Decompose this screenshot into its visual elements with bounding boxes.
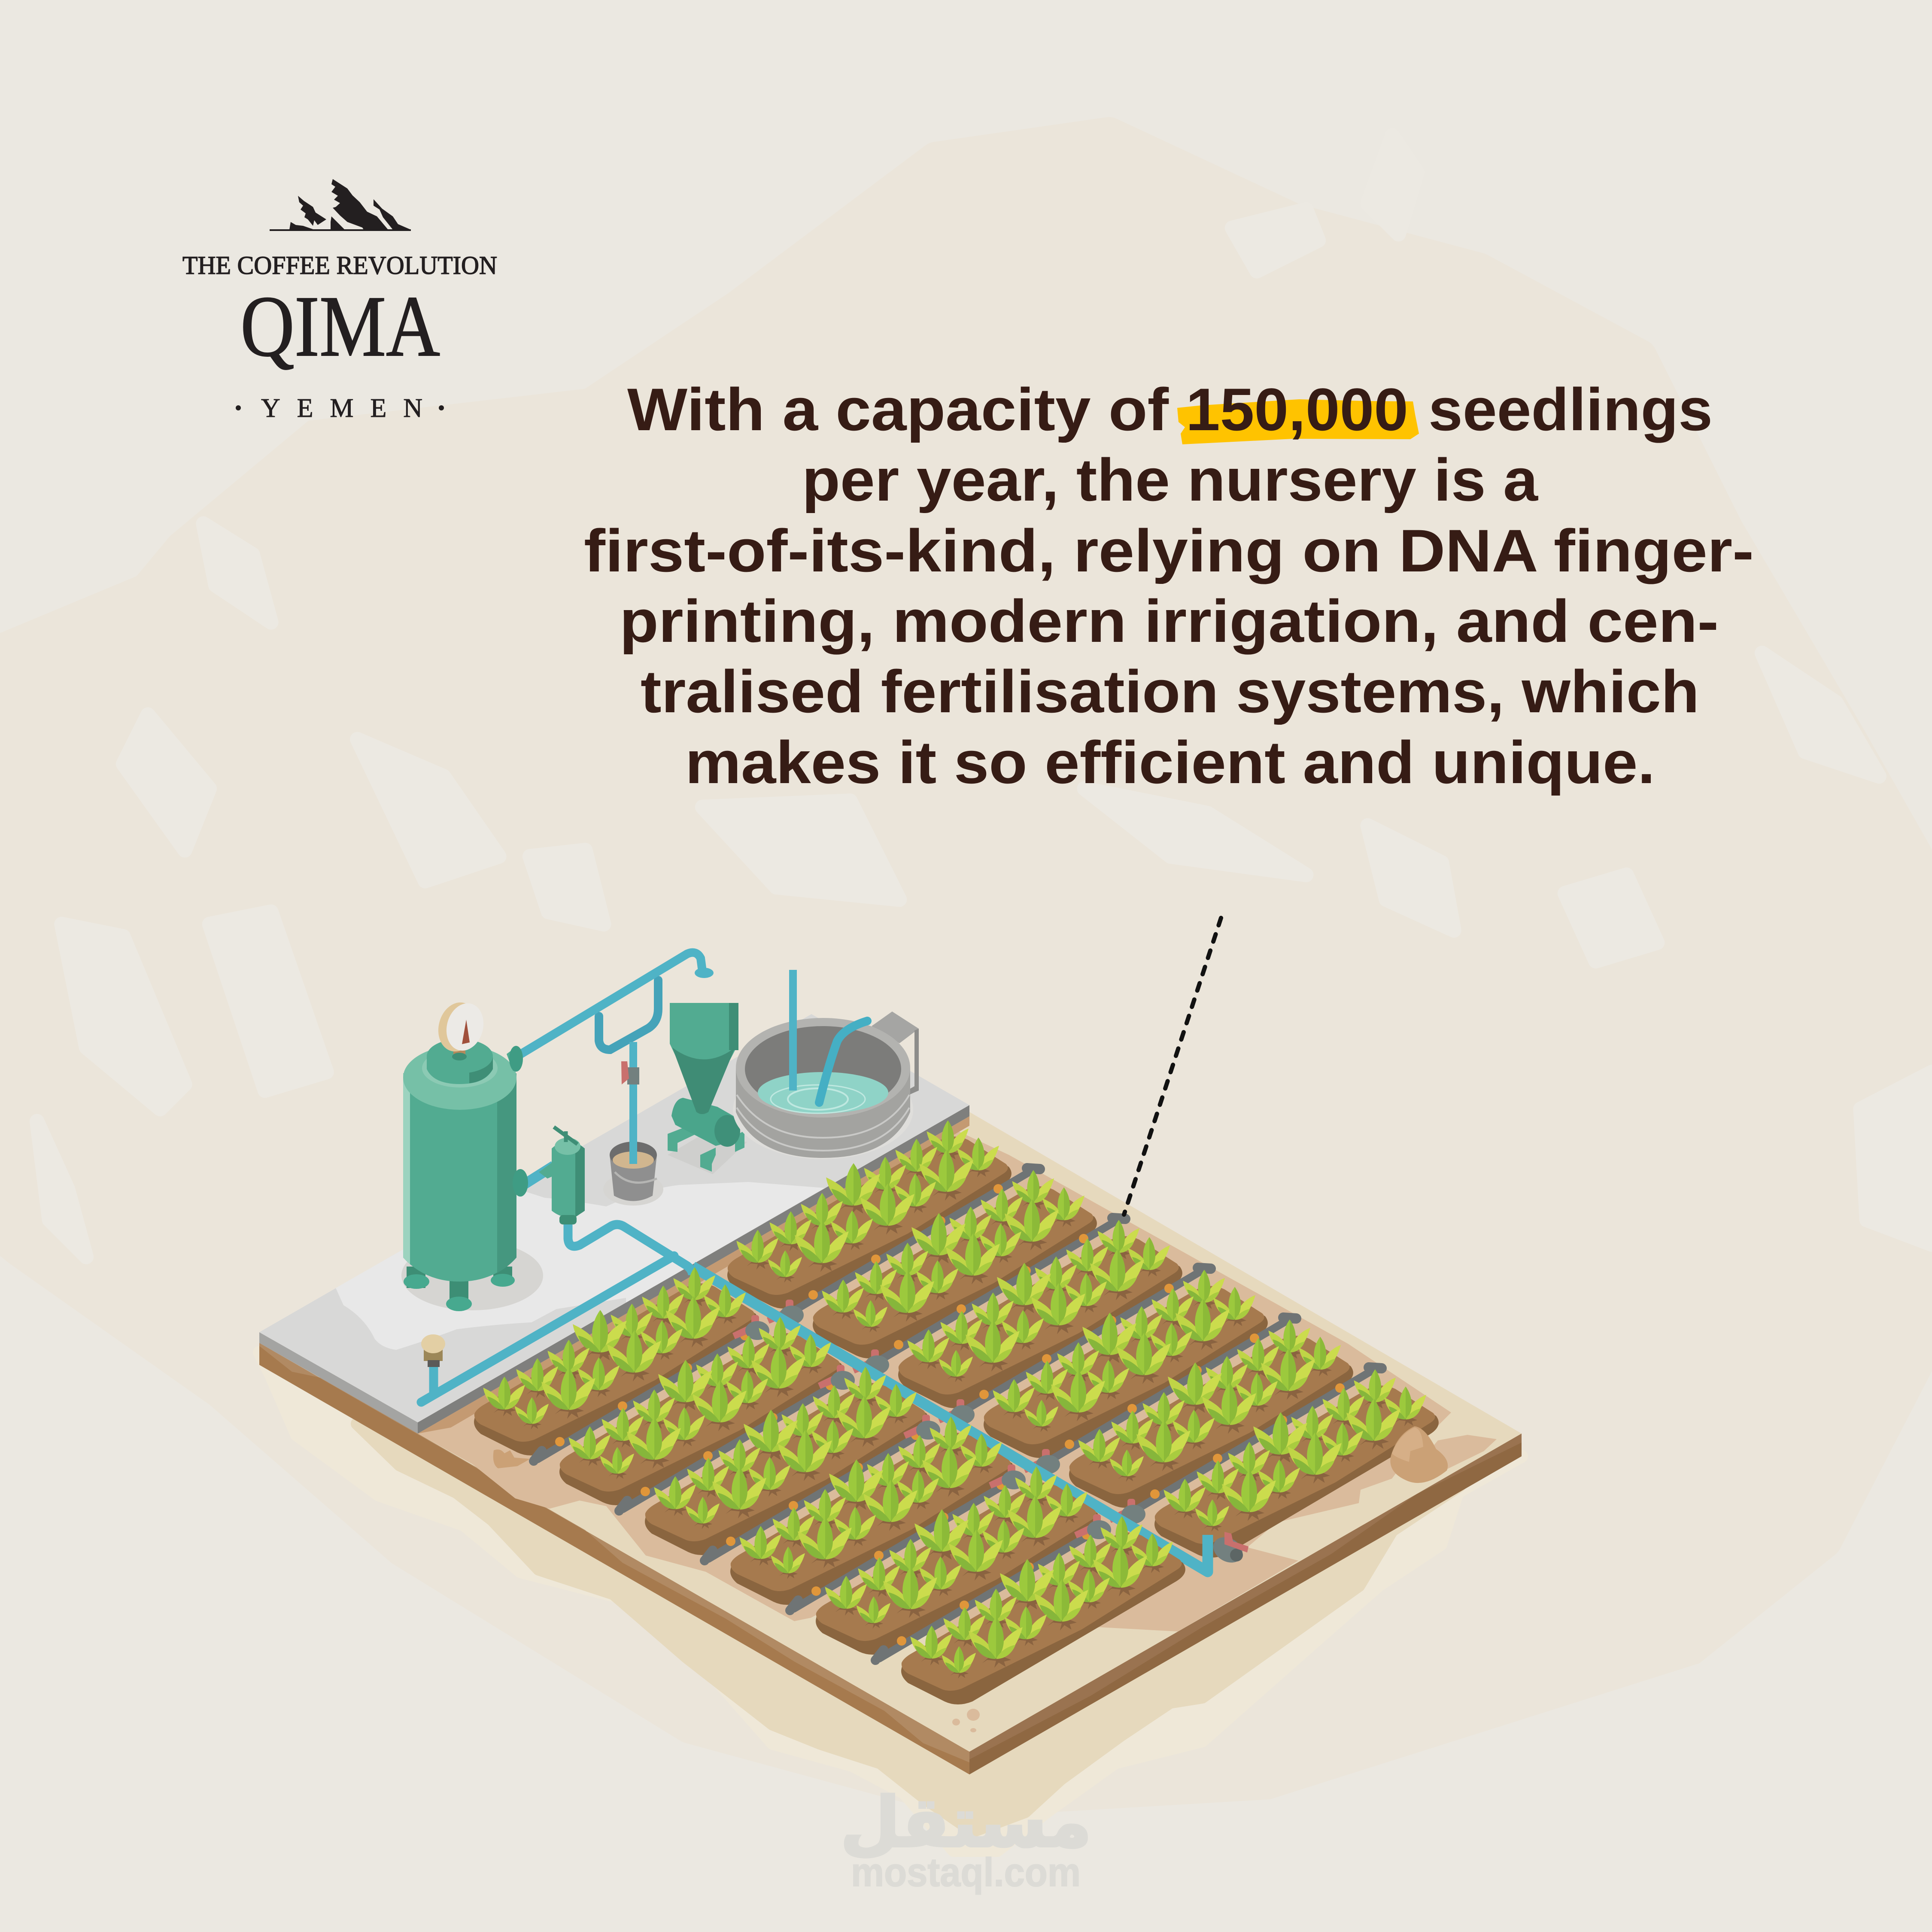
headline: 150,000 <box>1186 376 1408 443</box>
headline: printing, modern irrigation, and cen- <box>620 587 1719 655</box>
machinery <box>401 953 919 1402</box>
logo country: YEMEN <box>261 394 422 423</box>
upper water pipe <box>507 953 714 1072</box>
bed L5 <box>790 1464 1100 1655</box>
end valve <box>1209 1532 1249 1567</box>
rock shadow patch <box>1408 1435 1497 1481</box>
ground shadow <box>259 1352 1522 1850</box>
water tank <box>733 970 913 1159</box>
small stones <box>952 1709 980 1732</box>
soil dark patch <box>418 1125 1451 1662</box>
bed U4 <box>938 1268 1268 1458</box>
slab edge strip <box>418 1116 969 1434</box>
soil top <box>418 1112 1522 1752</box>
hopper grinder <box>668 1003 747 1174</box>
bed U3 <box>852 1218 1182 1408</box>
slab right face <box>418 1105 969 1434</box>
lower plant beds <box>474 1267 1185 1704</box>
platform <box>259 1014 1522 1774</box>
water stand <box>872 1012 919 1099</box>
rock left <box>493 1449 530 1468</box>
slab left face <box>259 1332 418 1434</box>
slab top <box>259 1014 969 1422</box>
highlight <box>1177 399 1419 444</box>
headline: tralised fertilisation systems, which <box>641 658 1699 725</box>
logo <box>182 179 497 423</box>
main irrigation pipe <box>693 1267 1208 1572</box>
sprinkler <box>421 1334 445 1367</box>
logo wordmark: QIMA <box>240 278 440 374</box>
bed U1 <box>727 1120 1012 1309</box>
headline: seedlings <box>1428 376 1713 443</box>
callout dotted line <box>1124 918 1221 1215</box>
icon: mountains <box>270 179 411 231</box>
upper plant beds <box>727 1120 1439 1558</box>
bed U6 <box>1109 1367 1439 1558</box>
icon: pressure gauge <box>433 998 489 1060</box>
bed U5 <box>1023 1318 1353 1508</box>
bed L2 <box>534 1315 844 1505</box>
rock right <box>1390 1426 1448 1483</box>
bed L3 <box>619 1365 929 1555</box>
headline: per year, the nursery is a <box>802 446 1538 513</box>
headline: With a capacity of <box>627 376 1169 443</box>
bed L4 <box>705 1415 1015 1605</box>
irrigation feed pipe <box>421 1224 693 1402</box>
watermark: mostaql.com <box>851 1850 1081 1895</box>
headline: first-of-its-kind, relying on DNA finger- <box>584 517 1754 584</box>
soil front face <box>259 1343 969 1774</box>
bed L1 <box>474 1267 758 1455</box>
soil right face <box>969 1434 1522 1774</box>
slab light area <box>336 1182 825 1350</box>
watermark: مستقل <box>840 1782 1092 1862</box>
headline <box>584 376 1754 796</box>
vertical feed pipe <box>629 1042 637 1164</box>
filter <box>513 1127 585 1224</box>
bed L6 <box>875 1514 1185 1704</box>
pressure tank <box>401 998 543 1311</box>
logo tagline: THE COFFEE REVOLUTION <box>182 251 497 279</box>
bed U2 <box>767 1168 1097 1358</box>
headline: makes it so efficient and unique. <box>685 729 1655 796</box>
bucket <box>603 1116 663 1206</box>
valve <box>621 1061 639 1084</box>
